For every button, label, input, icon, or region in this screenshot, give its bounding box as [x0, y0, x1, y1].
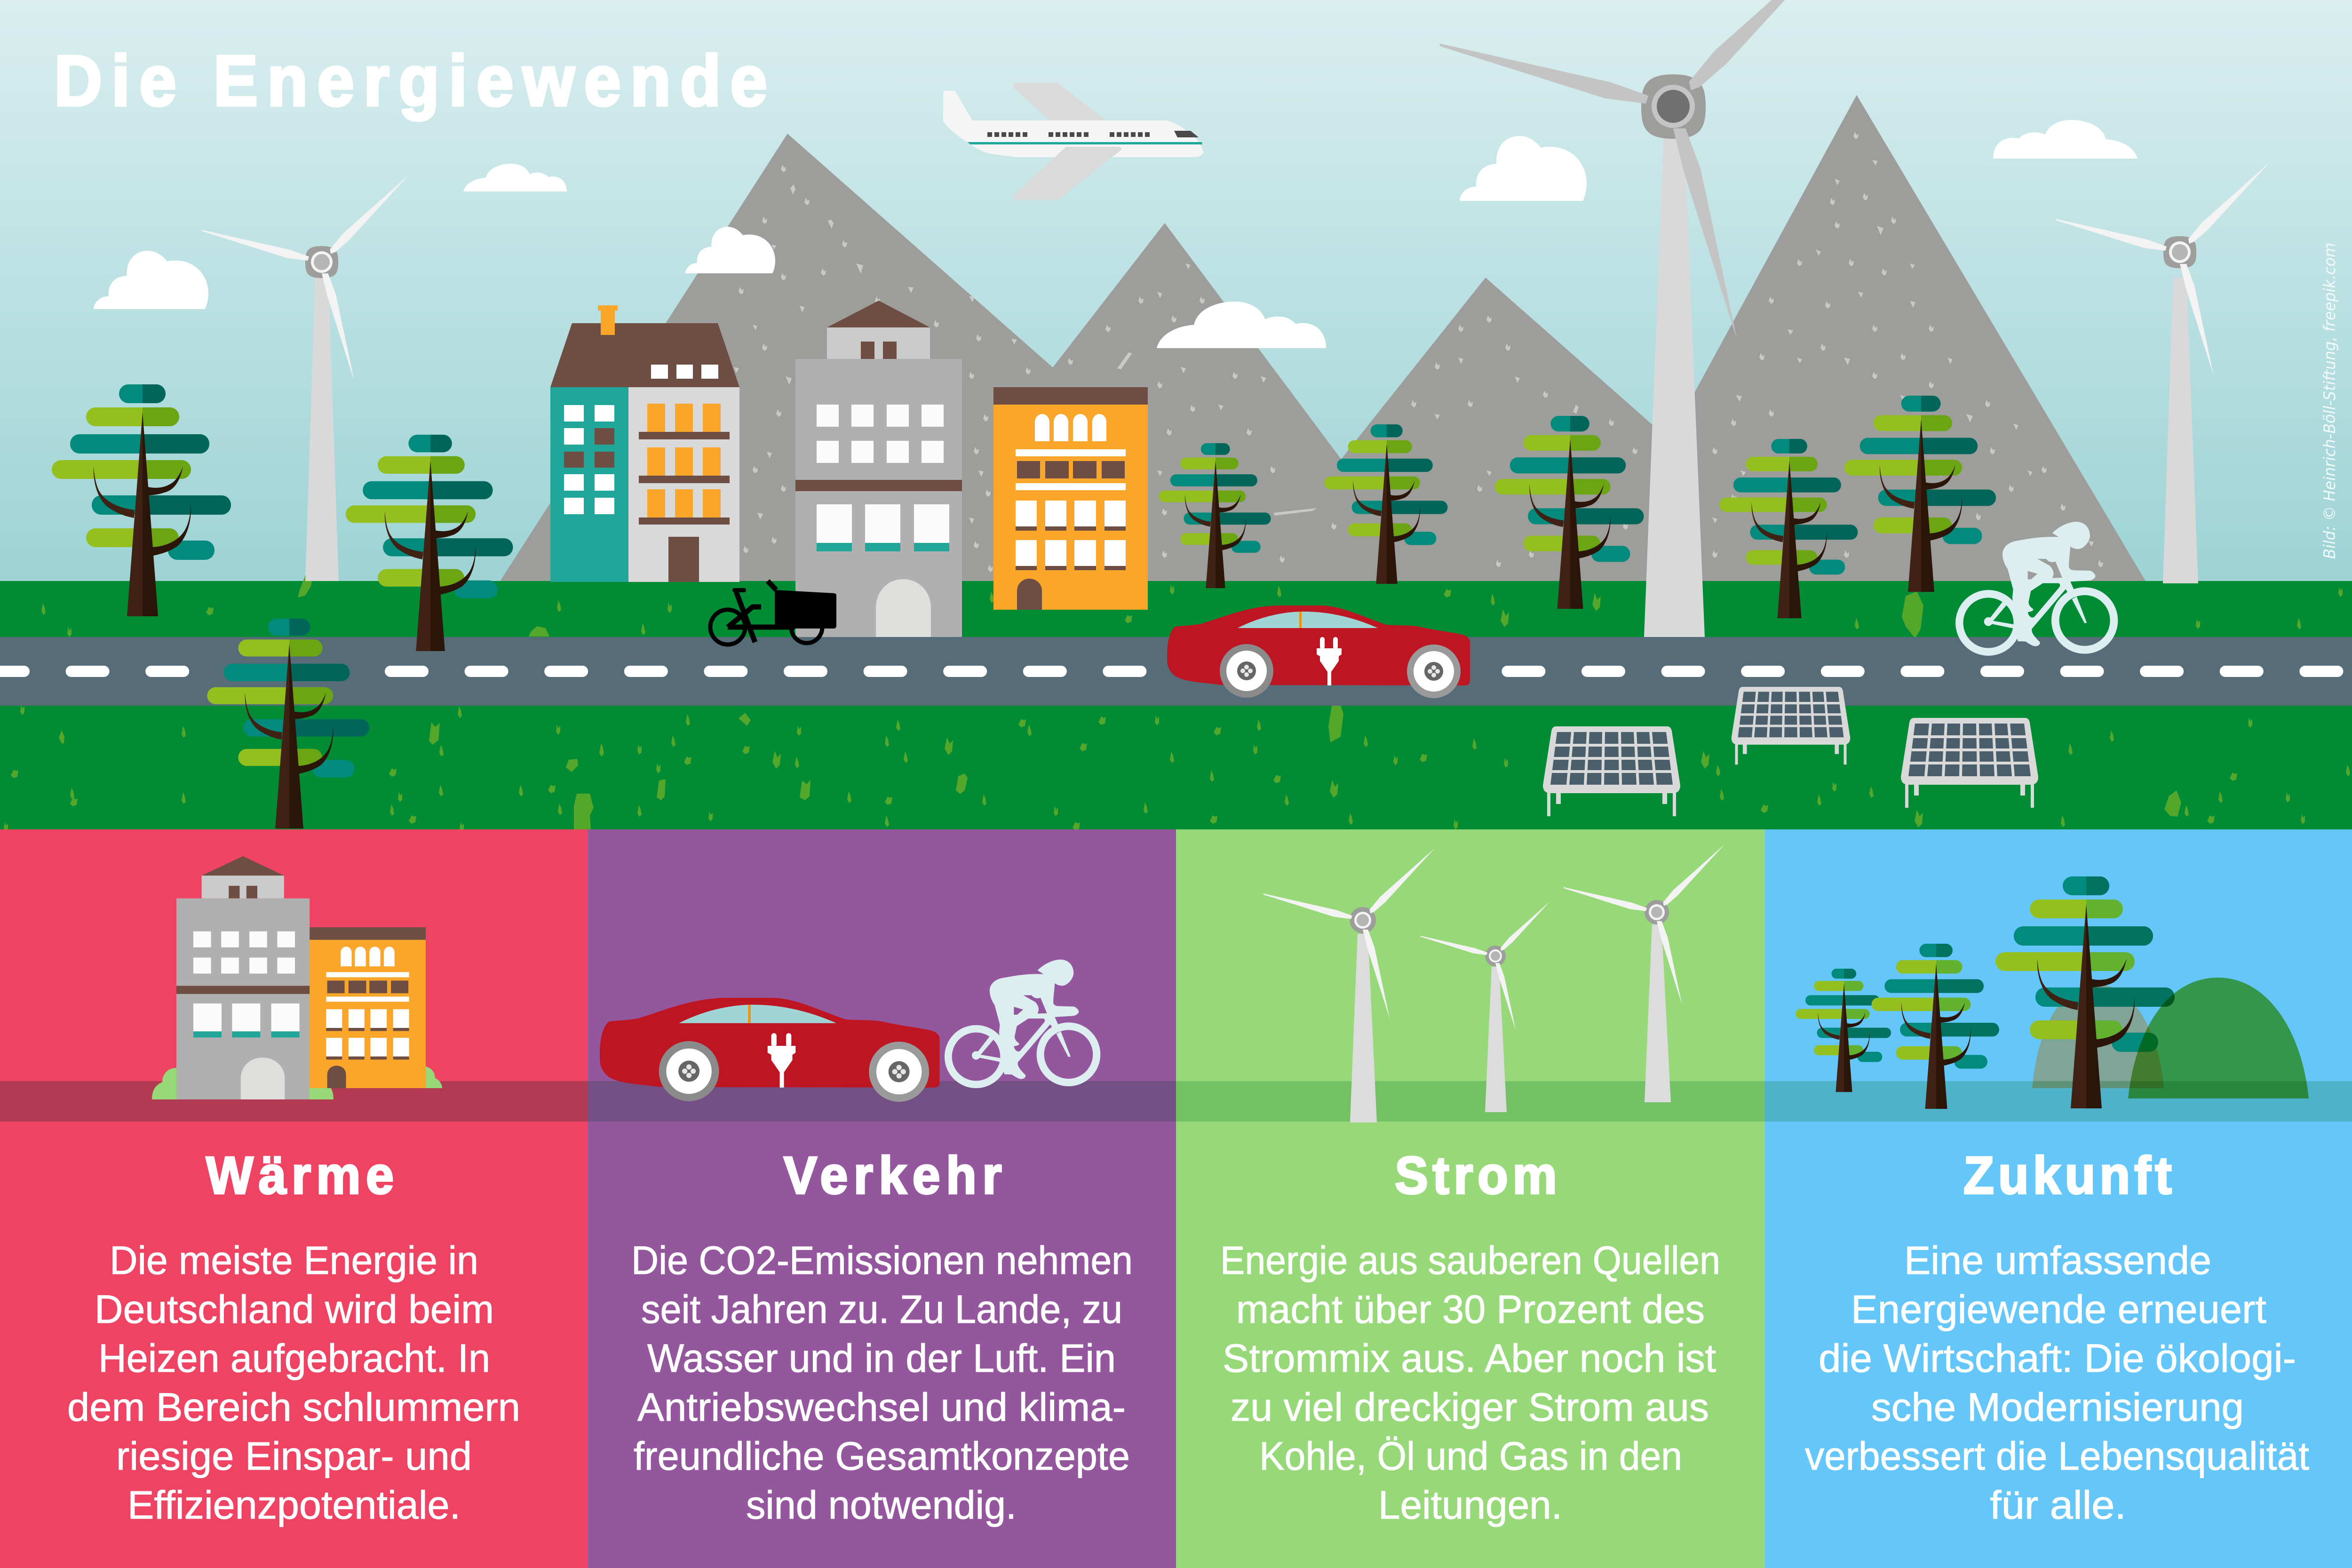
text block: Heizen aufgebracht. In [98, 1336, 490, 1380]
text block [631, 1238, 1133, 1527]
mountains [499, 95, 2147, 583]
sky [0, 0, 2352, 583]
solar panel [1732, 687, 1850, 764]
image credit: Bild: © Heinrich-Böll-Stiftung, freepik.com [2320, 243, 2339, 559]
heading: Verkehr [784, 1146, 1002, 1205]
house: teal and white townhouse [550, 305, 739, 582]
house: grey block [795, 301, 962, 637]
text block: für alle. [1990, 1483, 2126, 1527]
text block: freundliche Gesamtkonzepte [634, 1434, 1130, 1478]
text block: Antriebswechsel und klima- [637, 1385, 1126, 1429]
icon: cargo bike [710, 581, 836, 645]
tree in front of road [207, 619, 369, 828]
text block [1220, 1238, 1720, 1527]
text block: Strommix aus. Aber noch ist [1223, 1336, 1716, 1380]
tree [1844, 396, 1996, 592]
icon: cyclist [948, 960, 1097, 1084]
icon: cyclist [1959, 522, 2114, 652]
solar panel [1543, 726, 1680, 816]
text block: Wasser und in der Luft. Ein [647, 1336, 1116, 1380]
wind turbine right [2056, 162, 2270, 583]
wind turbine left [202, 175, 409, 581]
tree [1494, 416, 1644, 609]
heading: Wärme [206, 1146, 394, 1205]
tree [1719, 439, 1858, 618]
text block: riesige Einspar- und [116, 1434, 472, 1478]
large wind turbine centre [1440, 0, 1843, 637]
text block: zu viel dreckiger Strom aus [1231, 1385, 1709, 1429]
text block: Energie aus sauberen Quellen [1220, 1238, 1720, 1282]
text block: Energiewende erneuert [1851, 1287, 2266, 1331]
icon: wind turbines [1263, 844, 1724, 1122]
clouds [94, 120, 2137, 348]
text block: Deutschland wird beim [95, 1287, 494, 1331]
panel: Strom [1176, 829, 1765, 1568]
text block: sind notwendig. [746, 1483, 1017, 1527]
grass [0, 573, 2352, 832]
icon: electric car [1167, 605, 1470, 698]
text block: Leitungen. [1378, 1483, 1562, 1527]
tree [1324, 424, 1447, 584]
title: Die Energiewende [54, 41, 767, 121]
text block: verbessert die Lebensqualität [1805, 1434, 2309, 1478]
text block: die Wirtschaft: Die ökologi- [1819, 1336, 2296, 1380]
text block [67, 1238, 520, 1527]
landscape scene [0, 0, 2352, 832]
text block: Eine umfassende [1904, 1238, 2211, 1282]
icon: buildings [152, 856, 442, 1099]
panel: Verkehr [588, 829, 1176, 1568]
heading: Zukunft [1963, 1146, 2172, 1205]
tree far left [52, 384, 231, 616]
icon: forest and hills [1796, 876, 2309, 1109]
icon: airplane [943, 83, 1203, 200]
text block: macht über 30 Prozent des [1236, 1287, 1705, 1331]
tree [1159, 443, 1271, 588]
panel: Zukunft [1765, 829, 2352, 1568]
house: orange block [993, 387, 1148, 610]
text block: Die meiste Energie in [110, 1238, 478, 1282]
text block: Kohle, Öl und Gas in den [1259, 1434, 1682, 1478]
icon: electric car [600, 998, 940, 1102]
panel: Wärme [0, 829, 588, 1568]
text block: seit Jahren zu. Zu Lande, zu [641, 1287, 1122, 1331]
text block: Die CO2-Emissionen nehmen [631, 1238, 1133, 1282]
road [0, 637, 2352, 706]
solar panel [1901, 718, 2038, 808]
tree left [346, 435, 513, 651]
text block [1805, 1238, 2309, 1527]
text block: Effizienzpotentiale. [127, 1483, 461, 1527]
heading: Strom [1395, 1146, 1557, 1205]
text block: dem Bereich schlummern [67, 1385, 520, 1429]
text block: sche Modernisierung [1871, 1385, 2244, 1429]
